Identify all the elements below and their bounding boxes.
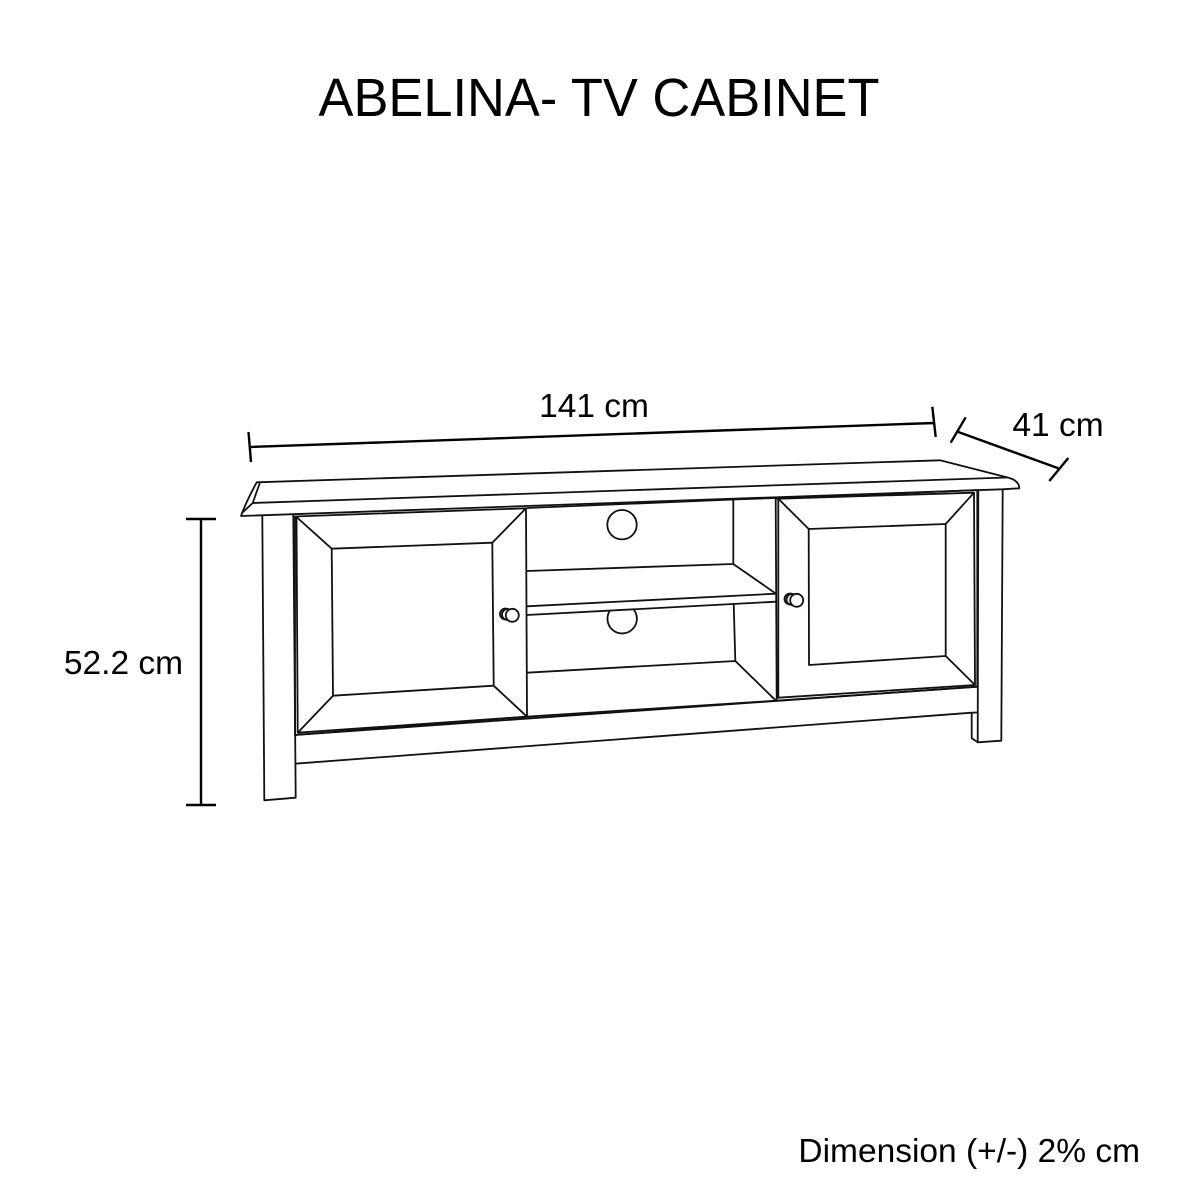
left leg (262, 515, 296, 800)
footnote: Dimension (+/-) 2% cm (798, 1133, 1140, 1170)
right leg (972, 489, 1003, 742)
lower rail (295, 687, 978, 764)
dimension: height 52.2 cm: 52.2 cm (64, 645, 183, 682)
upper cable hole (607, 510, 637, 539)
left door (295, 508, 527, 735)
lower cable hole (607, 610, 637, 633)
dimension: depth 41 cm: 41 cm (1012, 407, 1104, 444)
dimension: height 52.2 cm (64, 519, 216, 805)
title: ABELINA- TV CABINET (318, 68, 880, 128)
right door knob (784, 594, 803, 607)
left door knob (500, 608, 519, 622)
right door (776, 490, 977, 701)
cabinet top (241, 460, 1019, 516)
dimension: width 141 cm (248, 388, 936, 462)
TV cabinet line drawing (241, 460, 1019, 800)
dimension: width 141 cm: 141 cm (539, 388, 649, 425)
dimension: depth 41 cm (951, 407, 1104, 481)
centre compartment (527, 498, 776, 717)
